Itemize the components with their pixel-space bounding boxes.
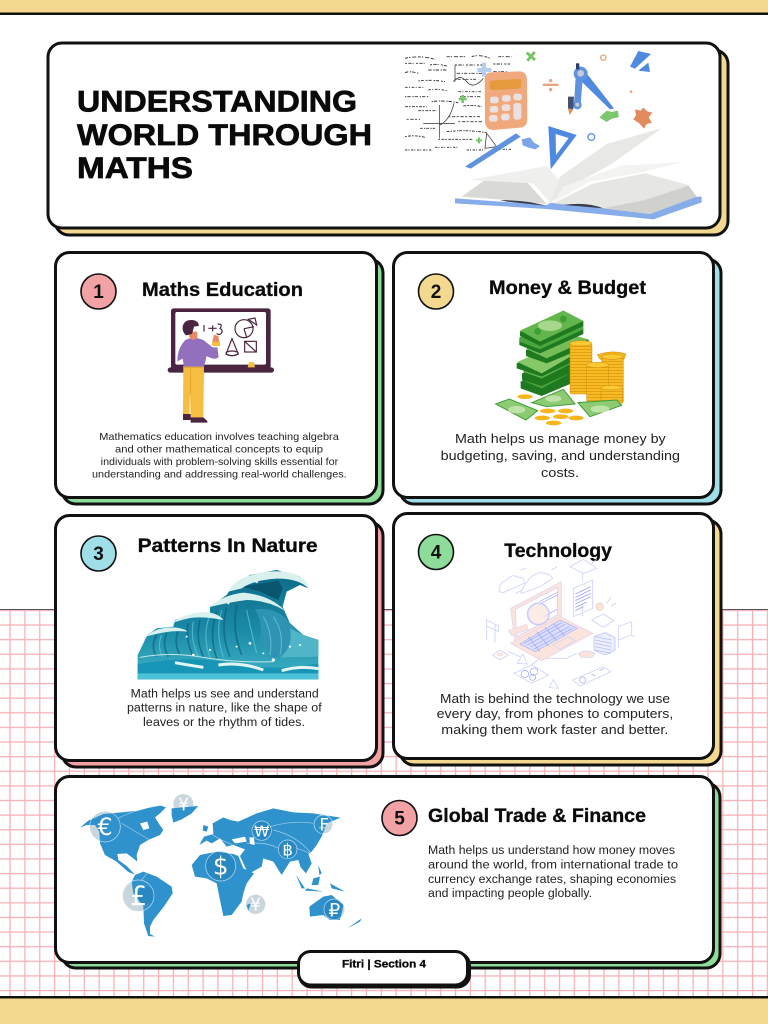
currency symbols: € xyxy=(97,813,113,841)
text block: every day, from phones to computers, xyxy=(437,706,673,721)
badge 4 xyxy=(418,534,454,570)
illustration: open book with maths tools xyxy=(405,51,702,219)
currency symbols: ₩ xyxy=(254,823,269,841)
heading: main title: WORLD THROUGH xyxy=(77,119,372,152)
badge 3 xyxy=(81,536,116,571)
text block: Math helps us see and understand xyxy=(131,688,319,700)
heading: main title: MATHS xyxy=(77,152,193,185)
text block xyxy=(92,431,347,480)
text block: and other mathematical concepts to equip xyxy=(115,444,323,456)
currency symbols: ฿ xyxy=(282,840,293,859)
panel: global trade and finance xyxy=(56,776,720,968)
text block: making them work faster and better. xyxy=(441,722,668,737)
heading: main title: UNDERSTANDING xyxy=(77,86,357,118)
panel: title xyxy=(48,43,728,235)
illustration: teacher at board xyxy=(168,308,274,423)
badge 2 xyxy=(418,274,454,309)
currency symbols xyxy=(97,796,340,922)
panel: money and budget xyxy=(394,252,721,504)
heading: patterns in nature: Patterns In Nature xyxy=(138,536,318,557)
text block xyxy=(127,688,323,729)
text block: Math is behind the technology we use xyxy=(440,691,670,706)
heading: technology: Technology xyxy=(504,541,612,562)
badge 5: 5 xyxy=(394,808,405,830)
text block: leaves or the rhythm of tides. xyxy=(143,717,305,729)
text block: Mathematics education involves teaching algebra xyxy=(99,431,339,443)
text block xyxy=(428,845,678,900)
panel: technology xyxy=(394,514,721,765)
badge 3: 3 xyxy=(93,544,104,565)
text block: Math helps us understand how money moves xyxy=(428,845,675,857)
badge 1 xyxy=(81,274,116,309)
text block xyxy=(441,431,680,480)
text block xyxy=(437,691,673,737)
currency symbols: ₣ xyxy=(318,816,329,835)
text block: currency exchange rates, shaping economies xyxy=(428,874,676,886)
panel: maths education xyxy=(56,252,383,504)
panel: patterns in nature xyxy=(56,516,383,767)
heading: maths education: Maths Education xyxy=(142,280,303,301)
icon: open book xyxy=(455,128,702,219)
currency symbols: ¥ xyxy=(250,896,261,916)
illustration: money and coins xyxy=(496,311,626,425)
icon: calculator xyxy=(485,71,527,130)
illustration: world map with currencies xyxy=(80,794,362,937)
text block: patterns in nature, like the shape of xyxy=(127,702,323,714)
currency symbols: ₽ xyxy=(328,901,340,922)
text block: around the world, from international trade to xyxy=(428,860,678,872)
footer label xyxy=(298,952,470,987)
currency symbols: ¥ xyxy=(178,796,189,816)
illustration: ocean wave xyxy=(138,570,318,679)
badge 4: 4 xyxy=(431,542,442,564)
currency symbols: £ xyxy=(130,881,147,912)
currency symbols: $ xyxy=(213,852,229,881)
coins xyxy=(570,341,626,403)
badge 2: 2 xyxy=(431,282,441,303)
badge 1: 1 xyxy=(93,282,104,303)
text block: understanding and addressing real-world challenges. xyxy=(92,468,347,480)
text block: individuals with problem-solving skills essential for xyxy=(101,456,339,468)
text block: and impacting people globally. xyxy=(428,888,592,900)
icon: compass xyxy=(568,63,614,115)
heading: money and budget: Money & Budget xyxy=(489,278,647,299)
background grid xyxy=(0,609,768,996)
footer label: Fitri | Section 4 xyxy=(342,959,427,971)
heading: global trade and finance: Global Trade & Finance xyxy=(428,806,646,827)
text block: costs. xyxy=(541,465,579,480)
illustration: isometric laptop xyxy=(487,559,635,688)
text block: budgeting, saving, and understanding xyxy=(441,448,680,463)
heading: main title xyxy=(77,86,372,185)
text block: Math helps us manage money by xyxy=(455,431,666,446)
top band xyxy=(0,0,768,15)
badge 5 xyxy=(382,800,417,836)
bottom band xyxy=(0,996,768,1024)
